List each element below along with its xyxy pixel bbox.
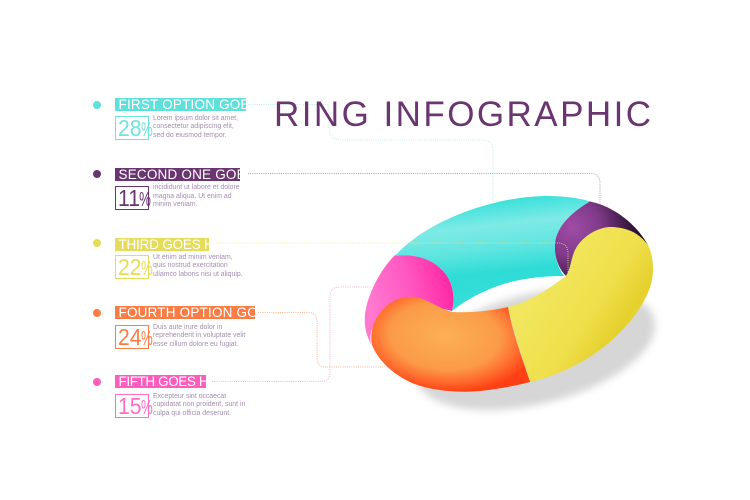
marker dot: fifth <box>92 378 100 386</box>
description: second option: incididunt ut labore et dolore <box>153 184 240 191</box>
marker dot: first <box>92 100 100 108</box>
connector: fifth option <box>212 287 372 382</box>
description: third option: Ut enim ad minim veniam, <box>153 254 233 260</box>
value box: 15% <box>115 394 149 418</box>
value box: 24% <box>115 325 149 349</box>
marker dot: fourth <box>92 308 100 316</box>
description: first option: consectetur adipiscing elit, <box>153 123 234 130</box>
ring chart <box>365 196 653 392</box>
value: 22% <box>118 254 153 280</box>
marker dot: second <box>92 170 100 178</box>
description: fourth option: esse cillum dolore eu fugiat. <box>153 341 238 348</box>
connector: second option <box>248 174 600 204</box>
value: 24%: 24 <box>118 324 142 350</box>
description: fifth option <box>153 392 245 417</box>
description: third option: ullamco laboris nisi ut aliquip. <box>153 271 243 278</box>
value: 28%: 28 <box>118 115 142 141</box>
value: 28% <box>118 115 153 141</box>
title: RING INFOGRAPHIC <box>274 95 654 134</box>
value: 11% <box>118 184 151 210</box>
ring segment: first 28% cyan <box>395 196 592 311</box>
value: 15% <box>118 393 153 419</box>
ring segment: fourth 24% orange <box>371 297 530 392</box>
description: fourth option: Duis aute irure dolor in <box>153 324 222 330</box>
description: second option: minim veniam. <box>153 201 197 208</box>
description: first option: sed do eiusmod tempor. <box>153 132 227 139</box>
value box: 28% <box>115 116 149 140</box>
description: second option: magna aliqua. Ut enim ad <box>153 193 232 200</box>
value: 11%: % <box>140 188 151 210</box>
description: fifth option: culpa qui officia deserunt. <box>153 410 231 417</box>
description: fifth option: Excepteur sint occaecat <box>153 392 226 400</box>
marker dot: third <box>92 239 100 247</box>
description: first option: Lorem ipsum dolor sit amet, <box>153 114 238 122</box>
description: fifth option: cupidatat non proident, sunt in <box>153 401 245 408</box>
ring segment: third 22% yellow <box>508 227 653 382</box>
value: 24% <box>118 324 153 350</box>
connector: third option <box>216 243 568 276</box>
value: 22%: % <box>141 258 153 280</box>
description: third option: quis nostrud exercitation <box>153 262 228 269</box>
description: fourth option: reprehenderit in voluptate velit <box>153 332 245 339</box>
description: third option <box>153 254 243 278</box>
ring segment: second 11% purple <box>555 202 648 276</box>
description: first option <box>153 114 238 139</box>
value: 28%: % <box>141 119 153 141</box>
value box: 11% <box>115 186 149 210</box>
description: fourth option <box>153 324 246 348</box>
value: 22%: 22 <box>118 254 142 280</box>
value: 24%: % <box>141 328 153 350</box>
value box: 22% <box>115 255 149 279</box>
value: 11%: 11 <box>118 184 140 210</box>
value: 15%: % <box>141 397 153 419</box>
ring shadow <box>402 266 668 432</box>
connector: fourth option <box>258 312 385 367</box>
connector: first option <box>248 104 493 204</box>
ring segment: fifth 15% pink <box>365 254 454 344</box>
value: 15%: 15 <box>118 393 142 419</box>
description: second option <box>153 184 240 208</box>
